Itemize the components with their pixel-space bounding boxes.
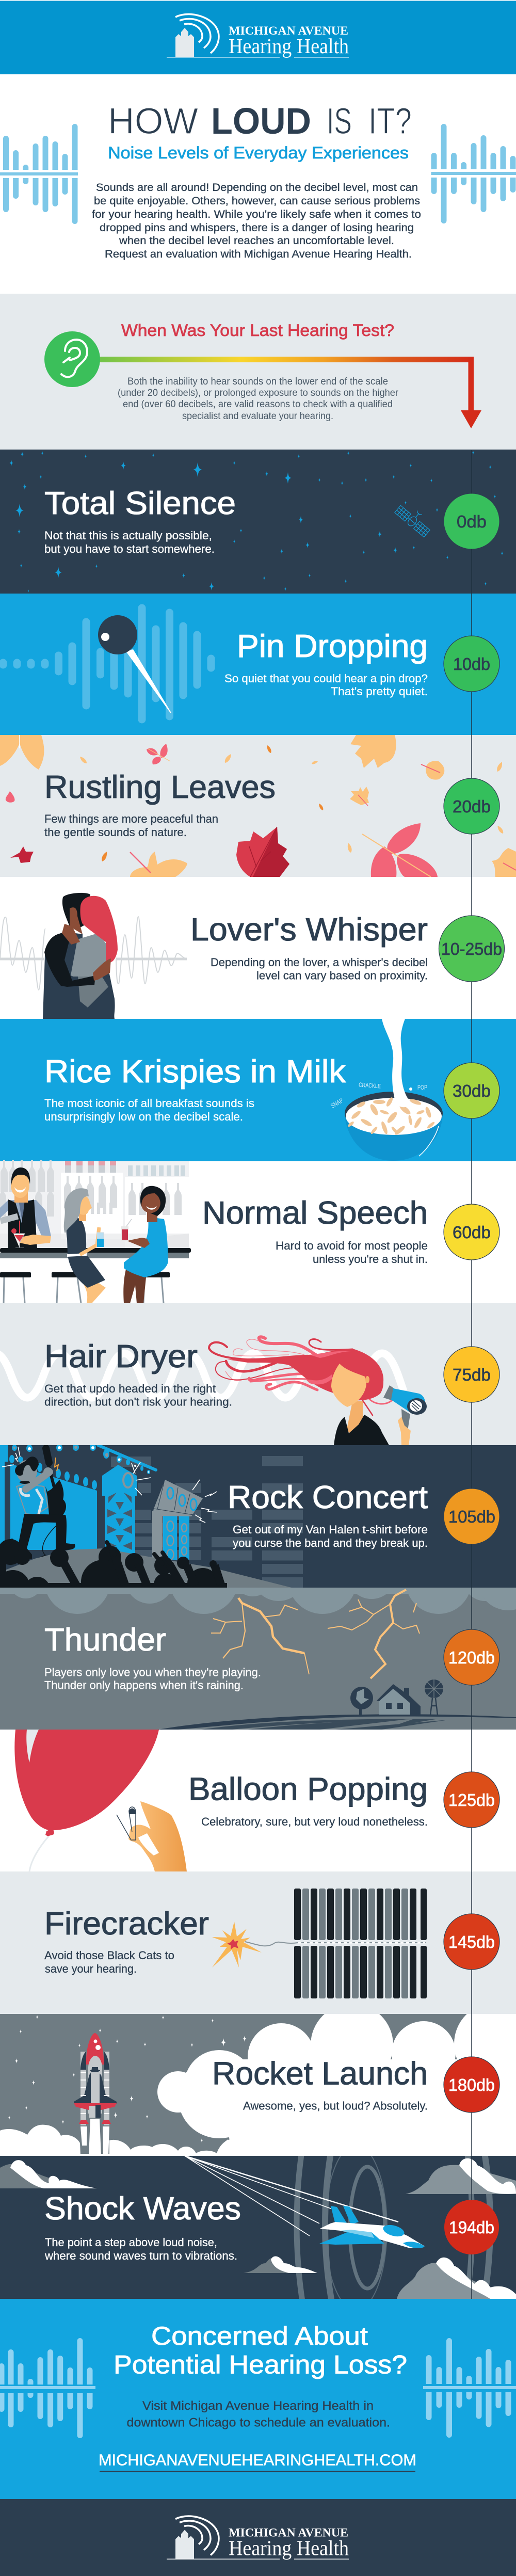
- description: Visit Michigan Avenue Hearing Health in: [142, 2399, 374, 2413]
- intro text: dropped pins and whispers, there is a danger of losing hearing: [100, 222, 414, 234]
- website link: MICHIGANAVENUEHEARINGHEALTH.COM: [99, 2451, 416, 2469]
- panel: total silence: [0, 450, 516, 594]
- speed lines: [185, 2156, 398, 2236]
- logo: [167, 2516, 349, 2560]
- stage lights: [9, 1444, 150, 1490]
- panel: lover's whisper: [0, 877, 516, 1019]
- waveform: [3, 608, 211, 719]
- badge: 145db: 145db: [448, 1932, 495, 1951]
- description: The point a step above loud noise,: [45, 2236, 217, 2249]
- badge: 194db: [444, 2200, 499, 2254]
- panel: header: [0, 1, 516, 74]
- equalizer blocks: [111, 1456, 303, 1588]
- badge: 125db: [444, 1772, 499, 1828]
- text block: specialist and evaluate your hearing.: [182, 411, 333, 422]
- stools: [0, 1272, 170, 1303]
- heading: Balloon Popping: [188, 1771, 428, 1807]
- timeline line: [471, 450, 472, 2299]
- bartender: [0, 1167, 51, 1248]
- heading: Thunder: [44, 1622, 166, 1658]
- logo: MICHIGAN AVENUE: [229, 24, 348, 37]
- heading: Potential Hearing Loss?: [114, 2350, 407, 2379]
- badge: 0db: [444, 493, 499, 549]
- badge: 10-25db: [439, 916, 505, 982]
- description: where sound waves turn to vibrations.: [44, 2249, 237, 2262]
- heading: Total Silence: [44, 486, 236, 521]
- waveform: intro left: [0, 127, 78, 221]
- logo: [167, 14, 349, 58]
- waveform: cta right: [423, 2341, 516, 2435]
- sound labels: [329, 1081, 427, 1110]
- heading: Shock Waves: [44, 2191, 241, 2227]
- lightning: [211, 1590, 420, 1678]
- icon: pin: [98, 615, 171, 713]
- stars: [8, 2015, 247, 2142]
- hair: [209, 1337, 392, 1415]
- description: save your hearing.: [45, 1962, 137, 1975]
- description: [44, 1382, 232, 1408]
- description: So quiet that you could hear a pin drop?: [224, 672, 428, 685]
- badge: 194db: 194db: [449, 2218, 494, 2237]
- heading: [114, 2322, 407, 2379]
- description: [44, 1666, 261, 1692]
- description: Celebratory, sure, but very loud nonetheless.: [201, 1815, 428, 1828]
- shock rings: [294, 2156, 493, 2299]
- badge: 60db: 60db: [453, 1223, 491, 1242]
- description: Avoid those Black Cats to: [44, 1949, 174, 1962]
- description: [44, 2236, 237, 2262]
- intro text: Request an evaluation with Michigan Avenue Hearing Health.: [105, 248, 412, 260]
- badge: 145db: [444, 1914, 499, 1970]
- description: unless you're a shut in.: [313, 1253, 428, 1266]
- heading: Pin Dropping: [237, 629, 428, 664]
- milk stream: [382, 1019, 413, 1107]
- illustration: couple: [43, 893, 118, 1019]
- decibel badges: [439, 493, 505, 2254]
- description: Get that updo headed in the right: [44, 1382, 216, 1395]
- description: Players only love you when they're playing.: [44, 1666, 261, 1678]
- illustration: balloon and hand: [14, 1730, 187, 1871]
- clouds: [0, 1588, 516, 1614]
- windmill: [425, 1679, 443, 1715]
- badge: 120db: [444, 1629, 499, 1685]
- title: HOW: [108, 101, 198, 142]
- speaker stack: [152, 1480, 203, 1560]
- description: [44, 812, 218, 839]
- panel: balloon popping: [14, 1730, 427, 1871]
- clouds: [0, 2158, 516, 2299]
- description: unsurprisingly low on the decibel scale.: [44, 1110, 243, 1123]
- logo: MICHIGAN AVENUE: [229, 2526, 348, 2539]
- crowd: [0, 1539, 227, 1588]
- description: That's pretty quiet.: [331, 685, 428, 698]
- panel: normal speech: [0, 1160, 516, 1303]
- intro text: Sounds are all around! Depending on the decibel level, most can: [96, 182, 418, 194]
- title: [108, 101, 412, 142]
- description: [127, 2399, 390, 2430]
- description: [224, 672, 428, 698]
- logo: Hearing Health: [229, 2536, 349, 2560]
- panel: hair dryer: [0, 1303, 516, 1445]
- sound labels: POP: [417, 1084, 427, 1091]
- stage floor: [0, 1548, 292, 1588]
- description: The most iconic of all breakfast sounds is: [44, 1097, 254, 1110]
- heading: Normal Speech: [202, 1195, 428, 1231]
- cloud: [0, 2003, 516, 2156]
- intro text: when the decibel level reaches an uncomfortable level.: [119, 235, 394, 247]
- illustration: stage: [0, 1445, 291, 1588]
- lighting tower: [102, 1465, 137, 1557]
- panel: rock concert: [0, 1445, 516, 1588]
- text block: Both the inability to hear sounds on the lower end of the scale: [127, 376, 388, 387]
- badge: 10db: 10db: [453, 654, 490, 674]
- house: [377, 1684, 421, 1715]
- badge: 0db: 0db: [457, 512, 487, 531]
- sparks: [2, 1447, 217, 1523]
- description: downtown Chicago to schedule an evaluation.: [127, 2415, 390, 2430]
- heading: Rocket Launch: [212, 2056, 428, 2091]
- counter: [0, 1248, 191, 1253]
- panel: firecracker: [0, 1871, 516, 2014]
- panel: rice krispies: [0, 1019, 516, 1161]
- title: IS: [327, 101, 352, 142]
- badge: 180db: [444, 2057, 499, 2113]
- heading: Lover's Whisper: [190, 912, 428, 948]
- illustration: jet: [319, 2206, 425, 2248]
- panel: footer: [0, 2499, 516, 2576]
- woman in blue: [121, 1186, 168, 1303]
- badge: 180db: 180db: [448, 2075, 495, 2094]
- subtitle: Noise Levels of Everyday Experiences: [108, 143, 409, 162]
- badge: 10-25db: 10-25db: [441, 939, 502, 958]
- sound labels: SNAP: [329, 1097, 345, 1110]
- safety pin: [117, 1807, 136, 1840]
- waveform: [0, 917, 187, 990]
- badge: 30db: [444, 1063, 499, 1118]
- heading: Rock Concert: [228, 1480, 428, 1515]
- badge: 75db: 75db: [453, 1365, 491, 1384]
- badge: 75db: [444, 1347, 499, 1402]
- description: level can vary based on proximity.: [256, 969, 428, 982]
- heading: Hair Dryer: [44, 1339, 198, 1374]
- description: but you have to start somewhere.: [44, 542, 215, 555]
- description: direction, but don't risk your hearing.: [44, 1396, 232, 1408]
- description: the gentle sounds of nature.: [44, 826, 187, 839]
- icon: ear: [44, 331, 100, 387]
- illustration: woman with blow-dried hair: [209, 1337, 427, 1445]
- description: [276, 1239, 428, 1266]
- waveform: intro right: [431, 127, 516, 221]
- description: Depending on the lover, a whisper's decibel: [211, 956, 428, 969]
- heading: When Was Your Last Hearing Test?: [121, 321, 394, 340]
- badge: 120db: 120db: [448, 1648, 495, 1667]
- title: LOUD: [211, 101, 311, 142]
- description: Few things are more peaceful than: [44, 812, 218, 825]
- description: Thunder only happens when it's raining.: [44, 1678, 244, 1692]
- heading: Rice Krispies in Milk: [44, 1054, 346, 1090]
- singer: [8, 1448, 75, 1560]
- woman with grey hair: [64, 1188, 106, 1303]
- badge: 20db: [444, 778, 499, 834]
- illustration: rocket: [74, 2033, 117, 2156]
- stars: [9, 451, 503, 593]
- panel: intro: [0, 101, 516, 260]
- panel: thunder: [0, 1588, 516, 1730]
- illustration: bar scene: [0, 1160, 191, 1303]
- badge: 30db: 30db: [453, 1081, 491, 1100]
- waveform: cta left: [0, 2341, 96, 2435]
- panel: pin dropping: [0, 594, 516, 735]
- text block: [118, 376, 399, 422]
- panel: call to action: [0, 2299, 516, 2499]
- illustration: farm: [158, 1679, 516, 1730]
- description: you curse the band and they break up.: [233, 1537, 428, 1549]
- hair dryer: [383, 1385, 427, 1431]
- illustration: firecrackers: [212, 1889, 427, 1998]
- face: [331, 1364, 366, 1407]
- intro text: be quite enjoyable. Others, however, can cause serious problems: [94, 195, 420, 207]
- description: [44, 1097, 254, 1123]
- title: IT?: [368, 101, 412, 142]
- text block: end (over 60 decibels, are valid reasons to check with a qualified: [123, 399, 393, 410]
- illustration: cereal bowl: [345, 1092, 443, 1161]
- leaves: [0, 735, 516, 877]
- heading: Rustling Leaves: [44, 770, 276, 805]
- description: [44, 1949, 174, 1975]
- sound labels: CRACKLE: [359, 1081, 381, 1090]
- badge: 105db: [444, 1489, 499, 1544]
- panel: last hearing test: [0, 294, 516, 450]
- description: Awesome, yes, but loud? Absolutely.: [243, 2100, 428, 2112]
- tree: [350, 1687, 373, 1716]
- logo: Hearing Health: [229, 34, 349, 58]
- intro text: for your hearing health. While you're likely safe when it comes to: [92, 209, 421, 220]
- sound wave: [0, 1353, 404, 1398]
- heading: Concerned About: [151, 2322, 368, 2350]
- hand: [128, 1801, 187, 1871]
- description: Get out of my Van Halen t-shirt before: [233, 1523, 428, 1536]
- description: Not that this is actually possible,: [44, 529, 212, 542]
- description: [44, 529, 215, 555]
- heading: Firecracker: [44, 1906, 209, 1942]
- badge: 125db: 125db: [448, 1790, 495, 1810]
- icon: satellite: [394, 500, 434, 537]
- text block: (under 20 decibels), or prolonged exposure to sounds on the higher: [118, 388, 399, 398]
- scale arrow: [72, 357, 481, 428]
- badge: 60db: [444, 1204, 499, 1260]
- badge: 10db: [444, 636, 499, 692]
- description: [233, 1523, 428, 1549]
- badge: 105db: 105db: [448, 1507, 495, 1526]
- panel: shock waves: [0, 2156, 516, 2299]
- panel: rocket launch: [0, 2014, 467, 2154]
- description: [211, 956, 428, 982]
- badge: 20db: 20db: [453, 797, 491, 816]
- description: Hard to avoid for most people: [276, 1239, 428, 1252]
- panel: rustling leaves: [0, 735, 516, 877]
- intro text: [92, 182, 421, 260]
